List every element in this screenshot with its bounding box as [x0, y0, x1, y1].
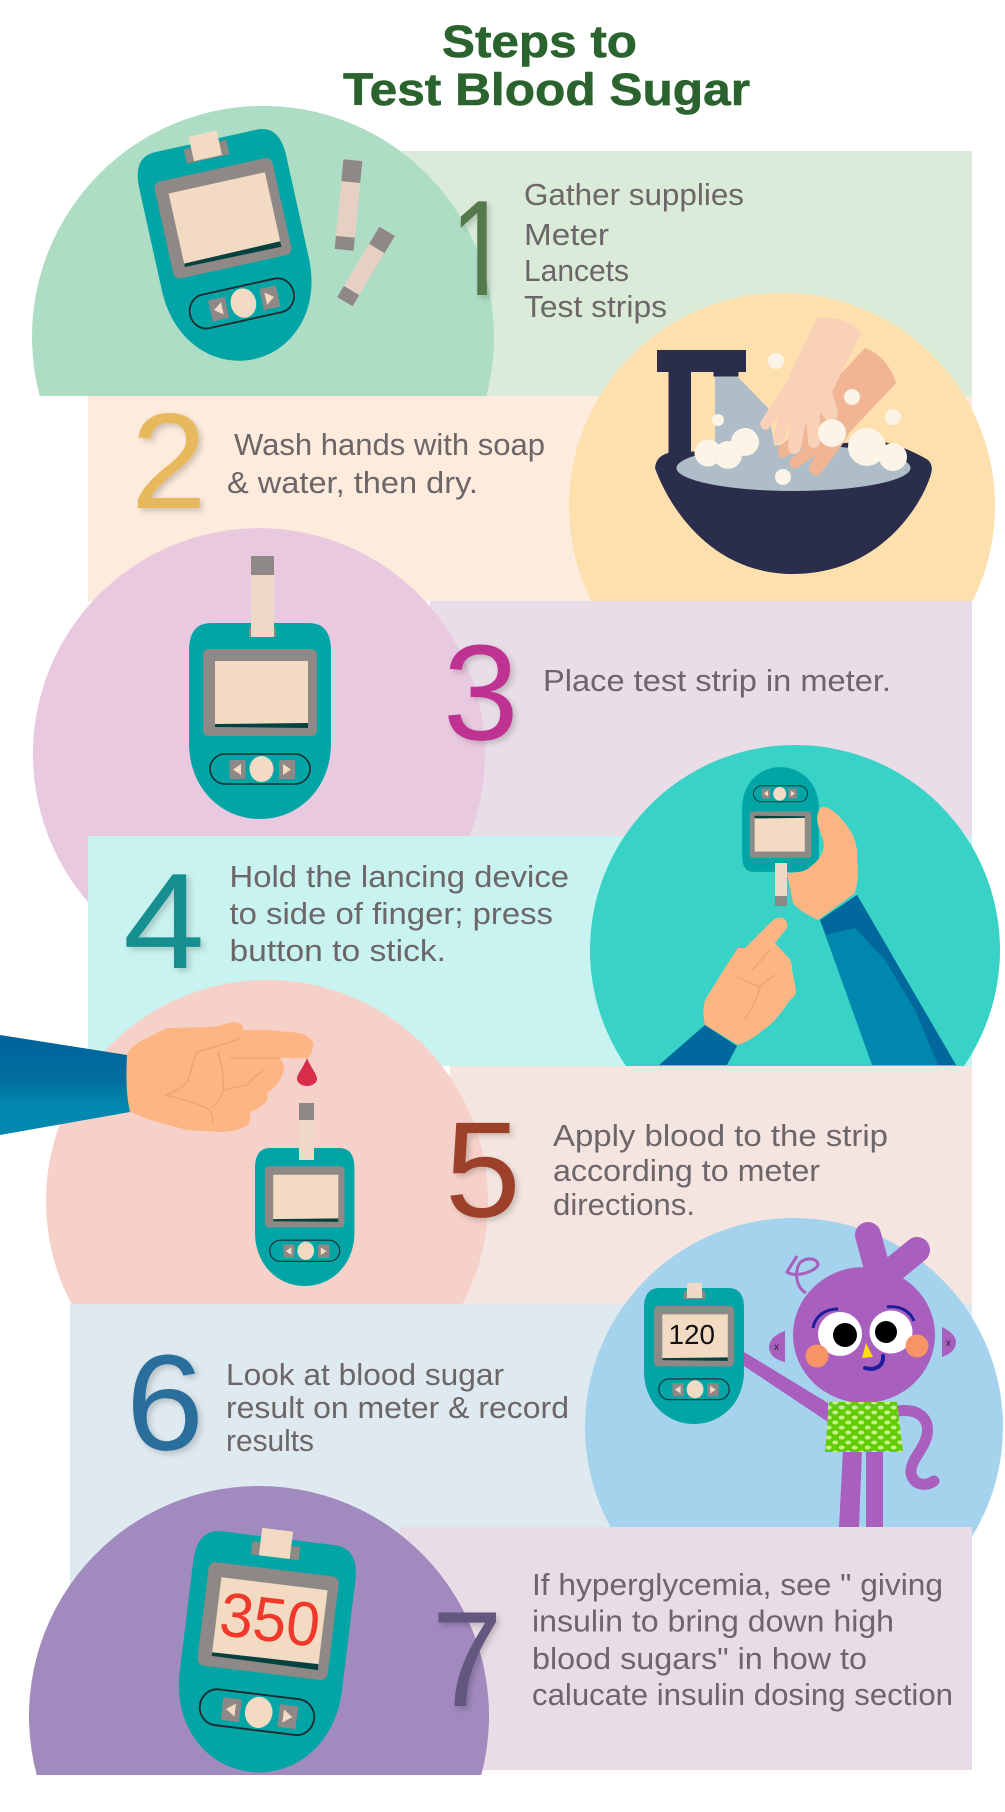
icon: meter with strip — [255, 1103, 354, 1286]
step 7 text: calucate insulin dosing section — [532, 1678, 953, 1712]
step 6 band — [70, 1304, 972, 1590]
step 4 text: to side of finger; press — [230, 897, 553, 931]
number 7: 7 — [432, 1583, 502, 1735]
icon: purple character — [744, 1235, 956, 1527]
step 4 text — [230, 860, 569, 968]
step 1 text — [524, 178, 744, 324]
step 1 text: Gather supplies — [524, 178, 744, 212]
step 7 text — [532, 1568, 953, 1712]
step 1 circle — [32, 106, 494, 396]
icon: meter reading 120: 120 — [668, 1319, 715, 1350]
icon: hand holding meter and pointing finger — [659, 767, 956, 1065]
step 2 band — [88, 396, 972, 601]
step 2 text — [227, 428, 545, 500]
step 7 band — [400, 1527, 972, 1770]
step 5 text: according to meter — [553, 1154, 820, 1188]
step 6 circle — [585, 1218, 1003, 1536]
step 2 circle — [569, 293, 995, 601]
step 1 text: Meter — [524, 218, 609, 252]
panel: step 6 read result — [70, 1218, 1003, 1590]
step 5 text — [553, 1119, 888, 1222]
step 5 text: Apply blood to the strip — [553, 1119, 888, 1153]
step 6 text: Look at blood sugar — [226, 1358, 504, 1392]
number 4: 4 — [123, 845, 205, 997]
panel: step 1 gather supplies — [32, 106, 972, 397]
icon: purple character: x — [946, 1338, 951, 1349]
icon: tilted meter reading 350: 350 — [216, 1579, 324, 1660]
step 2 text: Wash hands with soap — [234, 428, 545, 462]
step 3 circle — [33, 528, 485, 902]
step 2 text: & water, then dry. — [227, 466, 478, 500]
panel: step 2 wash hands — [88, 293, 995, 601]
icon: purple character: x — [774, 1342, 779, 1353]
step 7 text: If hyperglycemia, see " giving — [532, 1568, 943, 1602]
step 5 text: directions. — [553, 1188, 695, 1222]
number 2: 2 — [131, 385, 207, 537]
step 6 text: result on meter & record — [226, 1391, 569, 1425]
step 7 text: blood sugars" in how to — [532, 1642, 867, 1676]
step 5 circle — [46, 980, 488, 1304]
icon: test strip A — [335, 159, 362, 251]
step 3 text: Place test strip in meter. — [543, 664, 891, 698]
icon: faucet, bowl and hands — [655, 318, 932, 574]
title: Test Blood Sugar — [343, 64, 750, 115]
icon: test strip B — [337, 227, 395, 306]
icon: meter with strip inserted — [189, 556, 331, 819]
step 1 text: Lancets — [524, 254, 629, 288]
step 6 text: results — [226, 1424, 314, 1458]
panel: step 7 hyperglycemia — [29, 1486, 972, 1782]
step 4 text: Hold the lancing device — [230, 860, 569, 894]
step 7 circle — [29, 1486, 489, 1775]
title: Steps to — [442, 16, 637, 67]
step 4 circle — [590, 745, 1000, 1066]
step 6 text — [226, 1358, 569, 1458]
panel: step 4 lancing device — [88, 745, 1000, 1066]
step 1 band — [400, 151, 972, 396]
step 5 band — [450, 1066, 972, 1307]
icon: tilted meter — [131, 117, 328, 375]
icon: sleeve and hand with blood drop — [0, 1022, 317, 1135]
step 4 band — [88, 836, 972, 1066]
step 3 band — [430, 601, 972, 836]
number 6: 6 — [126, 1327, 204, 1479]
icon: meter reading 120 — [644, 1283, 744, 1424]
step 7 text: insulin to bring down high — [532, 1604, 894, 1638]
step 4 text: button to stick. — [230, 934, 446, 968]
step 1 text: Test strips — [524, 290, 667, 324]
icon: tilted meter reading 350 — [169, 1520, 360, 1782]
title — [343, 16, 750, 115]
number 5: 5 — [445, 1094, 521, 1246]
panel: step 5 apply blood — [0, 980, 972, 1307]
number 1: 1 — [451, 172, 510, 324]
number 3: 3 — [443, 616, 519, 768]
panel: step 3 place strip — [33, 528, 972, 902]
